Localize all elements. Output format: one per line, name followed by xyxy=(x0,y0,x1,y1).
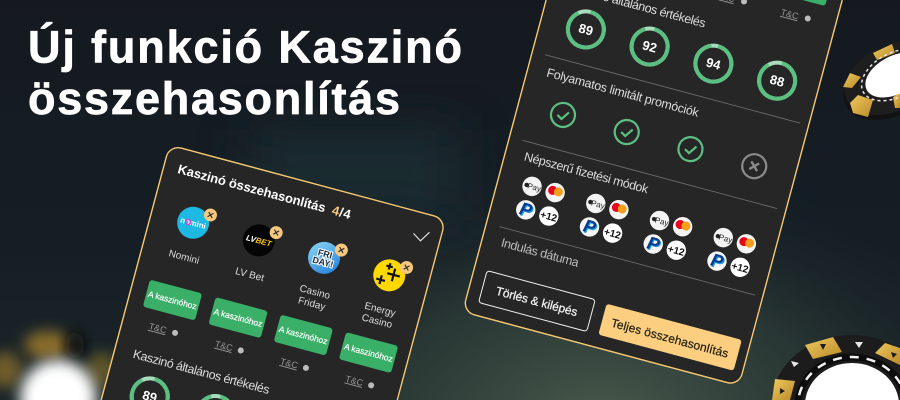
title xyxy=(28,22,462,124)
green buttons and terms row: T&C xyxy=(780,7,800,22)
casino: Nomini: A kaszinóhoz xyxy=(147,289,198,311)
icon: collapse chevron xyxy=(413,232,429,241)
score ring: 88 xyxy=(755,59,799,103)
casino: Nomini xyxy=(137,198,224,342)
casino: LV Bet: LVBET xyxy=(245,233,273,249)
icon: check 2 xyxy=(612,117,641,147)
payment methods column 3: P xyxy=(646,234,664,257)
casino: Nomini: nomini xyxy=(179,216,207,231)
score ring: 89 xyxy=(564,7,608,52)
casino chip top right xyxy=(832,27,900,134)
button: delete and exit xyxy=(479,271,595,331)
casino: LV Bet xyxy=(203,216,290,359)
payment methods column 2: P xyxy=(581,215,599,238)
score ring: 92: 92 xyxy=(641,37,659,56)
casino: Casino Friday: T&C xyxy=(279,356,300,371)
casino: Casino Friday: FRI xyxy=(317,247,333,261)
casino: Casino Friday: A kaszinóhoz xyxy=(278,324,329,346)
launch date heading: Indulás dátuma xyxy=(500,236,581,270)
payment heading: Népszerű fizetési módok xyxy=(523,150,651,196)
payment methods column 4: +12 xyxy=(730,261,750,276)
payment methods column 2: P xyxy=(582,217,600,239)
payment methods column 1: P xyxy=(517,198,535,221)
casino: Nomini: Nomini xyxy=(167,248,200,267)
casino: Casino Friday: Friday xyxy=(297,295,326,313)
payment methods column 2 xyxy=(577,192,631,246)
casino: Casino Friday: Casino xyxy=(298,283,332,302)
casino: Energy Casino xyxy=(333,250,420,394)
payment methods column 4 xyxy=(705,226,758,280)
rating section heading: Kaszinó általános értékelés xyxy=(131,347,271,397)
button: full comparison: Teljes összehasonlítás xyxy=(610,316,730,361)
payment methods column 4: P xyxy=(709,250,726,272)
casino chip bottom right xyxy=(772,335,900,400)
casino: Nomini: T&C xyxy=(148,321,168,335)
title: összehasonlítás xyxy=(28,73,400,124)
casino: LV Bet: LV Bet xyxy=(234,266,265,284)
score ring: 89: 89 xyxy=(577,20,595,39)
payment methods column 3: Pay xyxy=(654,216,670,228)
promotions heading: Folyamatos limitált promóciók xyxy=(545,66,701,120)
casino: LV Bet: A kaszinóhoz xyxy=(213,306,264,329)
payment methods column 4: P xyxy=(710,251,728,274)
icon: cross xyxy=(740,152,769,181)
title: Új funkció Kaszinó xyxy=(28,22,462,72)
casino: Energy Casino: T&C xyxy=(344,374,365,388)
panel: comparison card top xyxy=(101,145,446,400)
payment methods column 3: +12 xyxy=(666,244,686,259)
card background xyxy=(463,0,842,386)
button: full comparison xyxy=(598,304,742,371)
blurred chips in the bottom left xyxy=(0,331,119,400)
score ring: 92 xyxy=(193,392,237,400)
payment methods column 2: Pay xyxy=(590,198,606,211)
payment methods column 3 xyxy=(641,209,694,263)
card counter: 4/4 xyxy=(330,203,353,222)
score ring: 88: 88 xyxy=(768,72,786,90)
payment methods column 1: +12 xyxy=(539,210,559,225)
score ring: 89 xyxy=(128,374,172,400)
green buttons and terms row xyxy=(716,0,828,27)
casino: LV Bet: T&C xyxy=(214,339,234,353)
payment methods column 4: Pay xyxy=(718,233,733,245)
score ring: 92 xyxy=(628,25,672,69)
casino: Energy Casino: A kaszinóhoz xyxy=(343,341,394,364)
panel: comparison card bottom xyxy=(463,0,842,386)
casino: Casino Friday: DAY! xyxy=(311,255,334,270)
score ring: 94: 94 xyxy=(704,55,723,73)
score ring: 94 xyxy=(691,42,735,86)
payment methods column 1: Pay xyxy=(526,181,542,194)
payment methods column 2: +12 xyxy=(603,227,622,242)
payment methods column 3: P xyxy=(645,233,663,255)
icon: check 3 xyxy=(676,134,705,164)
button: delete and exit: Törlés & kilépés xyxy=(494,284,579,319)
payment methods column 1 xyxy=(514,175,567,229)
payment methods column 1: P xyxy=(519,200,536,222)
icon: check 1 xyxy=(548,100,578,130)
casino: Energy Casino: Energy xyxy=(363,301,397,320)
casino: Energy Casino: Casino xyxy=(360,312,394,331)
card background xyxy=(101,145,446,400)
casino: Casino Friday xyxy=(268,233,355,377)
card heading: Kaszinó összehasonlítás xyxy=(176,161,327,215)
